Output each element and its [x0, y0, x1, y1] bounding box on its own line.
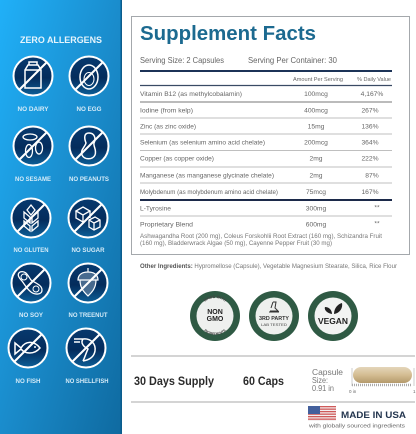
- label: no fish: NO FISH: [16, 378, 41, 385]
- icon: no egg: [70, 56, 108, 96]
- strip: supply details: [131, 356, 416, 402]
- icon: capsule with ruler: 1: [413, 389, 416, 394]
- servings per container: Serving Per Container: 30: [248, 56, 338, 65]
- table: nutrients: **: [374, 204, 380, 212]
- table: nutrients: 15mg: [308, 124, 325, 130]
- text: capsule size: Capsule: [312, 368, 344, 377]
- heading: zero allergens: ZERO ALLERGENS: [20, 35, 102, 46]
- table: nutrients: 87%: [365, 172, 379, 180]
- table: nutrients: 100mcg: [304, 91, 328, 98]
- table: nutrients: Iodine (from kelp): [140, 108, 193, 114]
- badge: non gmo: MADE WITH: [204, 296, 226, 302]
- badge: vegan: [308, 291, 358, 341]
- icon: no soy: [12, 264, 50, 302]
- icon: capsule with ruler: [349, 367, 416, 394]
- blend ingredients: [140, 234, 382, 247]
- blend ingredients: Ashwagandha Root (200 mg), Coleus Forskohlii Root Extract (160 mg), Schizandra Fruit: [140, 234, 382, 240]
- badge: 3rd party lab tested: LAB TESTED: [261, 323, 287, 327]
- label: no sugar: NO SUGAR: [72, 247, 105, 254]
- label: no egg: NO EGG: [76, 106, 102, 113]
- table: nutrients: 136%: [361, 124, 379, 130]
- table: nutrients: Amount Per Serving: [293, 77, 343, 83]
- table: nutrients: Copper (as copper oxide): [140, 156, 214, 162]
- badge: 3rd party lab tested: 3RD PARTY: [259, 316, 289, 322]
- panel: supplement facts: [132, 16, 410, 254]
- text: capsule size: Size:: [312, 376, 328, 385]
- text: 60 caps: 60 Caps: [243, 376, 284, 388]
- label: no treenut: NO TREENUT: [68, 312, 108, 319]
- table: nutrients: 167%: [361, 189, 379, 196]
- text: capsule size: [312, 368, 344, 393]
- table: nutrients: 300mg: [306, 206, 327, 212]
- icon: no sesame: [14, 126, 52, 166]
- label: no dairy: NO DAIRY: [18, 106, 49, 113]
- table: nutrients: L-Tyrosine: [140, 206, 171, 212]
- table: nutrients: Zinc (as zinc oxide): [140, 124, 196, 130]
- icon: no shellfish: [66, 328, 106, 368]
- text: made in usa: MADE IN USA: [341, 410, 407, 420]
- badge: non gmo: NON: [207, 309, 223, 316]
- table: nutrients: Manganese (as manganese glycinate chelate): [140, 172, 274, 180]
- table: nutrients: 75mcg: [306, 189, 326, 196]
- table: nutrients: 400mcg: [304, 108, 328, 114]
- table: nutrients: 222%: [361, 156, 379, 162]
- icon: capsule with ruler: 0 in: [349, 389, 357, 394]
- badge: non gmo: INGREDIENTS: [204, 329, 226, 335]
- table: nutrients: 4,167%: [361, 91, 383, 98]
- badge: non gmo: [190, 291, 240, 341]
- table: nutrients: 600mg: [306, 222, 327, 228]
- heading: supplement facts: Supplement Facts: [140, 22, 316, 45]
- badge: vegan: VEGAN: [318, 316, 348, 326]
- table: nutrients: 2mg: [309, 156, 323, 162]
- label: no gluten: NO GLUTEN: [14, 247, 49, 254]
- table: nutrients: 267%: [361, 108, 379, 114]
- table: nutrients: 2mg: [309, 172, 323, 180]
- table: nutrients: Vitamin B12 (as methylcobalamin): [140, 91, 242, 98]
- badge: 3rd party lab tested: [249, 291, 299, 341]
- table: nutrients: Proprietary Blend: [140, 222, 193, 228]
- text: globally sourced: with globally sourced ingredients: [309, 424, 406, 430]
- table: nutrients: Selenium (as selenium amino acid chelate): [140, 140, 265, 146]
- text: capsule size: 0.91 in: [312, 384, 334, 393]
- table: nutrients: Molybdenum (as molybdenum amino acid chelate): [140, 189, 278, 196]
- table: nutrients: 364%: [361, 140, 379, 146]
- label: no soy: NO SOY: [19, 312, 44, 319]
- label: no sesame: NO SESAME: [15, 176, 51, 183]
- table: nutrients: **: [374, 220, 380, 228]
- icon: no treenut: [68, 264, 108, 302]
- label: no shellfish: NO SHELLFISH: [66, 378, 109, 385]
- table: nutrients: 200mcg: [304, 140, 328, 146]
- blend ingredients: (160 mg), Bladderwrack Algae (50 mg), Cayenne Pepper Fruit (30 mg): [140, 241, 332, 247]
- flag: usa: [308, 406, 336, 421]
- label: no peanuts: NO PEANUTS: [69, 176, 109, 183]
- table: nutrients: % Daily Value: [357, 77, 391, 83]
- table: nutrients: [140, 71, 392, 228]
- serving size: Serving Size: 2 Capsules: [140, 56, 224, 65]
- icon: no dairy: [14, 56, 52, 96]
- icon: no fish: [8, 328, 48, 368]
- text: 30 days supply: 30 Days Supply: [134, 376, 215, 388]
- badge: non gmo: GMO: [207, 316, 224, 323]
- icon: no sugar: [68, 198, 108, 238]
- other ingredients: Other Ingredients: Hypromellose (Capsule), Vegetable Magnesium Stearate, Silica, Rice Flour: [140, 264, 397, 270]
- icon: no peanuts: [70, 126, 108, 166]
- icon: no gluten: [12, 198, 50, 238]
- panel: zero allergens: [0, 0, 122, 434]
